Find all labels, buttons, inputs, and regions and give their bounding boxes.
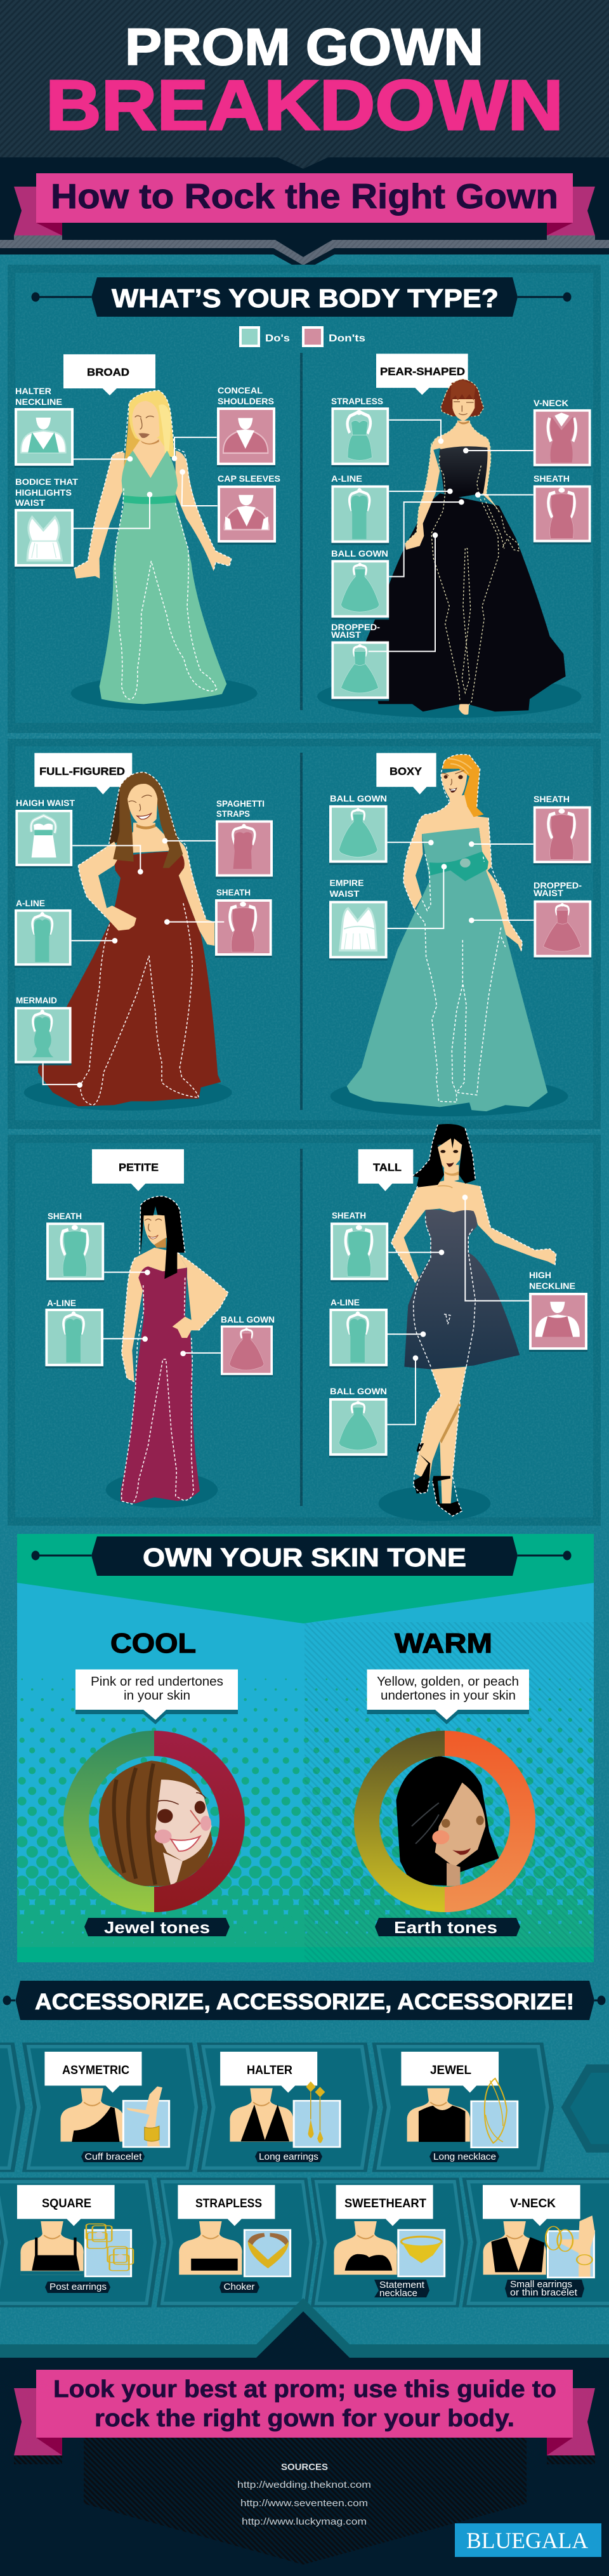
tag: petite: [92, 1149, 184, 1191]
do: sheath: SHEATH: [332, 1210, 366, 1220]
do: halter neckline: NECKLINE: [15, 397, 62, 407]
panel: broad: [15, 354, 280, 711]
callout: cool: Pink or red undertones: [91, 1675, 223, 1689]
card: v-neck: V-NECK: [510, 2197, 556, 2210]
dont: v-neck: [534, 398, 591, 468]
heading: own your skin tone: [32, 1536, 571, 1576]
badge: earth tones: Earth tones: [394, 1918, 497, 1937]
tag: broad: [63, 354, 155, 395]
do: mermaid: MERMAID: [16, 995, 57, 1005]
do: a-line: [15, 898, 72, 968]
do: bodice that highlights waist: HIGHLIGHTS: [15, 487, 72, 498]
do: mermaid: [15, 995, 72, 1066]
card: sweetheart: [334, 2185, 445, 2299]
card: jewel: [401, 2052, 518, 2162]
card: sweetheart: necklace: [379, 2288, 417, 2299]
do: a-line: [45, 1298, 103, 1368]
tag: broad: BROAD: [87, 366, 129, 378]
do: bodice that highlights waist: WAIST: [15, 498, 45, 508]
do: strapless: [331, 396, 389, 467]
dont: ball gown: [221, 1314, 275, 1377]
card: square: Post earrings: [49, 2282, 107, 2292]
warm column: [367, 1628, 529, 1937]
sources shield: [84, 2438, 527, 2565]
tag: full-figured: FULL-FIGURED: [39, 765, 125, 777]
card: jewel: JEWEL: [430, 2064, 471, 2077]
sources: http://wedding.theknot.com: [237, 2480, 371, 2490]
badge: jewel tones: Jewel tones: [104, 1918, 210, 1937]
do: halter neckline: HALTER: [15, 386, 51, 396]
dont: ball gown: BALL GOWN: [221, 1314, 275, 1324]
callout lines: petite: [103, 1270, 221, 1356]
sources: SOURCES: [281, 2462, 328, 2473]
logo: bluegala: BLUEGALA: [466, 2528, 588, 2553]
panel: pear-shaped: [317, 353, 591, 718]
title: PROM GOWN: [125, 18, 483, 76]
tag: boxy: [376, 753, 436, 795]
banner ribbon: [14, 173, 595, 243]
do: ball gown: [329, 793, 388, 865]
panel: boxy: [329, 753, 591, 1116]
do: ball gown: [331, 548, 389, 619]
halftone dots: [2, 1679, 609, 1953]
card: halter: Long earrings: [259, 2151, 318, 2162]
card: v-neck: [483, 2185, 595, 2298]
title: BREAKDOWN: [46, 66, 563, 145]
title: [46, 18, 563, 145]
tag: petite: PETITE: [119, 1161, 159, 1173]
heading: what's your body type: [32, 277, 571, 317]
footer band: [0, 2298, 609, 2576]
dont: dropped-waist: DROPPED-: [534, 880, 582, 890]
dont: sheath: [534, 794, 591, 865]
heading: cool: COOL: [110, 1628, 196, 1659]
do: dropped-waist: [331, 622, 389, 701]
dont: v-neck: V-NECK: [534, 398, 568, 408]
panel: full-figured: [15, 753, 273, 1111]
tag: pear-shaped: [376, 353, 468, 395]
panel: accessorize: [0, 1981, 609, 2308]
sources: http://www.luckymag.com: [242, 2516, 367, 2527]
heading: accessorize: ACCESSORIZE, ACCESSORIZE, ACCESSORIZE!: [35, 1990, 574, 2014]
dont: spaghetti straps: STRAPS: [216, 809, 250, 819]
do: a-line: [331, 473, 389, 545]
do: halter neckline: [15, 386, 74, 468]
do: ball gown: BALL GOWN: [331, 548, 388, 558]
legend: Don'ts: [329, 333, 365, 344]
do: dropped-waist: WAIST: [331, 630, 361, 640]
warm side texture: [304, 1622, 594, 1962]
dont: spaghetti straps: SPAGHETTI: [216, 798, 265, 809]
card: sweetheart: SWEETHEART: [344, 2197, 426, 2210]
dont: conceal shoulders: [217, 385, 275, 467]
dont: sheath: SHEATH: [216, 887, 251, 897]
callout: cool: [75, 1669, 238, 1724]
do: haigh waist: [15, 798, 75, 868]
do: ball gown: [329, 1386, 388, 1458]
blue area: [17, 1583, 594, 1962]
do: bodice that highlights waist: [15, 477, 78, 569]
figure: tall: [379, 1124, 556, 1521]
frame: body type panels: [8, 265, 601, 1526]
dont: spaghetti straps: [216, 798, 273, 878]
dont: cap sleeves: CAP SLEEVES: [218, 473, 280, 484]
dark band: [0, 157, 609, 254]
dont: high neckline: [529, 1270, 587, 1352]
legend: Do's: [265, 333, 290, 344]
tag: tall: [358, 1149, 413, 1191]
figure: broad: [71, 390, 258, 711]
do: ball gown: BALL GOWN: [330, 793, 387, 803]
tag: boxy: BOXY: [390, 765, 422, 777]
card: square: SQUARE: [42, 2197, 91, 2210]
callout lines: pear-shaped: [369, 420, 534, 651]
figure: full-figured: [24, 772, 232, 1111]
dont: sheath: SHEATH: [534, 473, 570, 484]
do: a-line: A-LINE: [16, 898, 45, 908]
dont: cap sleeves: [218, 473, 280, 545]
card: strapless: STRAPLESS: [195, 2197, 262, 2210]
card: asymetric: Cuff bracelet: [85, 2151, 142, 2162]
card: jewel: Long necklace: [433, 2151, 496, 2162]
callout: warm: Yellow, golden, or peach: [377, 1675, 519, 1689]
card: v-neck: or thin bracelet: [510, 2287, 578, 2298]
dont: dropped-waist: WAIST: [534, 888, 563, 898]
accessory cards backgrounds: [0, 2043, 609, 2308]
do: strapless: STRAPLESS: [331, 396, 383, 406]
card: strapless: [178, 2185, 291, 2293]
callout lines: broad: [73, 437, 218, 529]
heading: warm: WARM: [395, 1628, 492, 1659]
card: asymetric: ASYMETRIC: [62, 2064, 129, 2077]
closing ribbon: [14, 2370, 595, 2464]
panel: petite: [45, 1149, 275, 1508]
do: ball gown: BALL GOWN: [330, 1386, 387, 1396]
do: empire waist: WAIST: [330, 888, 360, 899]
panel: skin tone: [2, 1534, 609, 1962]
card: halter: HALTER: [247, 2064, 292, 2077]
callout lines: boxy: [388, 840, 534, 928]
tag: full-figured: [34, 753, 132, 795]
figure: pear-shaped: [317, 379, 582, 718]
tag: tall: TALL: [373, 1161, 402, 1173]
figure: boxy: [331, 755, 568, 1116]
ring and portrait: cool: [76, 1743, 232, 1899]
dont: dropped-waist: [534, 880, 591, 960]
panel: tall: [329, 1124, 587, 1521]
do: a-line: A-LINE: [47, 1298, 76, 1308]
heading: what's your body type: WHAT’S YOUR BODY TYPE?: [112, 284, 499, 313]
dont: conceal shoulders: SHOULDERS: [218, 396, 274, 406]
banner ribbon: How to Rock the Right Gown: [51, 176, 558, 216]
sources: http://www.seventeen.com: [240, 2498, 368, 2509]
do: sheath: [46, 1211, 104, 1282]
closing ribbon: rock the right gown for your body.: [95, 2405, 514, 2432]
card: asymetric: [44, 2052, 170, 2162]
dont: high neckline: NECKLINE: [529, 1281, 575, 1291]
do: a-line: A-LINE: [331, 1297, 360, 1307]
do: empire waist: [329, 878, 388, 960]
do: sheath: [331, 1210, 388, 1282]
figure: petite: [106, 1196, 228, 1508]
heading: accessorize: [3, 1981, 605, 2020]
card: strapless: Choker: [223, 2282, 255, 2292]
card: square: [17, 2185, 133, 2293]
closing ribbon: Look your best at prom; use this guide to: [53, 2376, 556, 2403]
logo: bluegala: [455, 2523, 601, 2557]
callout: warm: undertones in your skin: [381, 1689, 516, 1703]
tag: pear-shaped: PEAR-SHAPED: [380, 366, 465, 378]
dont: high neckline: HIGH: [529, 1270, 551, 1280]
do: haigh waist: HAIGH WAIST: [16, 798, 75, 808]
dont: sheath: [215, 887, 272, 958]
badge: jewel tones: [84, 1918, 230, 1937]
chevron divider: [0, 240, 609, 271]
callout lines: tall: [388, 1194, 529, 1425]
dont: conceal shoulders: CONCEAL: [218, 385, 263, 395]
dont: sheath: [534, 473, 591, 545]
callout lines: full-figured: [43, 838, 224, 1088]
sources: [237, 2462, 371, 2527]
card: halter: [220, 2052, 341, 2162]
do: empire waist: EMPIRE: [330, 878, 364, 888]
card: sweetheart: Statement: [379, 2280, 425, 2290]
header background: [0, 0, 609, 171]
cool column: [75, 1628, 238, 1937]
do: a-line: A-LINE: [331, 473, 362, 484]
card: v-neck: Small earrings: [510, 2279, 572, 2290]
heading: own your skin tone: OWN YOUR SKIN TONE: [143, 1543, 466, 1572]
badge: earth tones: [375, 1918, 520, 1937]
do: sheath: SHEATH: [48, 1211, 82, 1221]
callout: warm: [367, 1669, 529, 1724]
dont: sheath: SHEATH: [534, 794, 570, 804]
do: a-line: [329, 1297, 388, 1368]
ring and portrait: warm: [367, 1743, 523, 1899]
do: dropped-waist: DROPPED-: [331, 622, 380, 632]
legend: [239, 326, 365, 347]
panel background: [17, 1534, 594, 1962]
do: bodice that highlights waist: BODICE THAT: [15, 477, 78, 487]
callout: cool: in your skin: [124, 1689, 190, 1703]
